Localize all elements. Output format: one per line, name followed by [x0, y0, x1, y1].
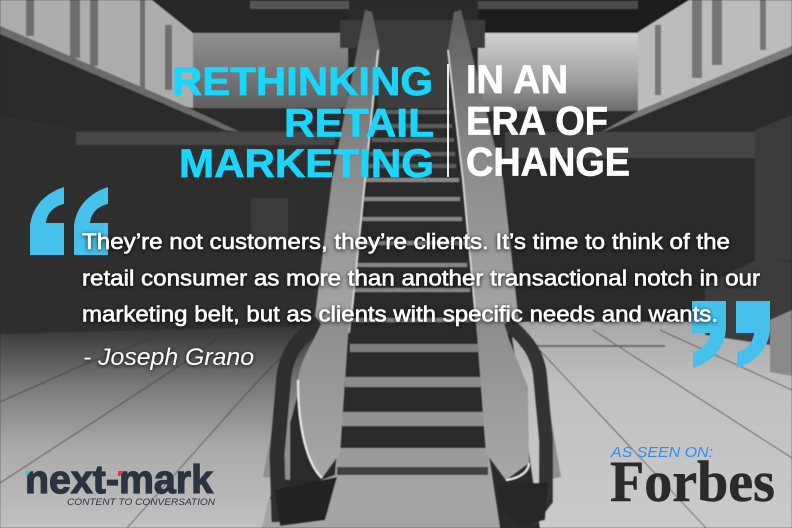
left balcony front face [193, 33, 348, 108]
left balcony side face [0, 0, 193, 108]
right mezzanine band [505, 132, 755, 158]
left balcony beam [0, 26, 240, 132]
pedestal left [251, 198, 288, 248]
quote attribution: - Joseph Grano [83, 344, 254, 371]
icon: closing quotation mark [692, 301, 770, 368]
right balcony beam [600, 46, 792, 133]
title: left cyan block: RETHINKING [172, 60, 433, 104]
quote text: retail consumer as more than another transactional notch in our [82, 266, 760, 290]
quote text: marketing belt, but as clients with specific needs and wants. [82, 302, 718, 326]
left lower wall [0, 115, 330, 335]
logo: as seen on Forbes: AS SEEN ON: [610, 444, 713, 461]
logo: as seen on Forbes: Forbes [610, 449, 775, 514]
title: left cyan block [172, 60, 434, 186]
title: left cyan block: RETAIL [284, 102, 434, 146]
top structure with railings [152, 0, 348, 33]
title: right white block [466, 58, 630, 184]
right balcony front face [478, 33, 638, 111]
right balcony side face [638, 0, 792, 111]
quote text [82, 229, 760, 326]
right far wall [755, 115, 792, 260]
logo: next-mark: CONTENT TO CONVERSATION [67, 497, 215, 508]
logo: next-mark: next-mark [25, 458, 214, 502]
title: right white block: IN AN [466, 58, 568, 102]
floor joint lines [0, 328, 792, 528]
left floor [0, 326, 316, 528]
left mezzanine band [76, 132, 335, 145]
escalator steps [262, 48, 500, 528]
left balustrade [263, 10, 380, 526]
title: left cyan block: MARKETING [179, 142, 434, 186]
right kiosk [705, 258, 792, 345]
right floor [510, 322, 792, 528]
title divider [447, 64, 449, 177]
title: right white block: ERA OF [466, 100, 608, 144]
title: right white block: CHANGE [466, 140, 630, 184]
icon: opening quotation mark [30, 187, 108, 255]
right balustrade [448, 10, 561, 526]
quote text: They’re not customers, they’re clients. It’s time to think of the [82, 229, 730, 254]
